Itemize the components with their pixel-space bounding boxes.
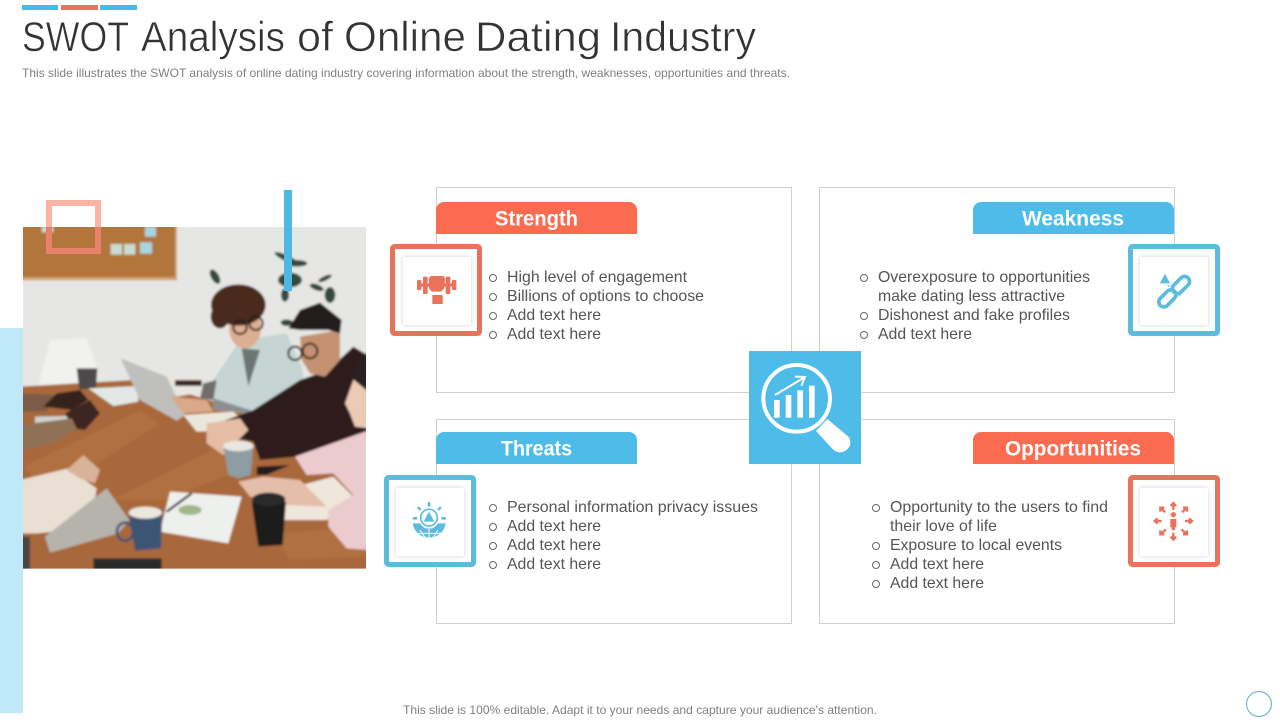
opportunities heading: Opportunities [1005, 438, 1141, 460]
weakness list: Add text here [878, 326, 972, 343]
opportunities list [872, 499, 1108, 592]
strength list: High level of engagement [507, 269, 688, 286]
weakness list: make dating less attractive [878, 288, 1065, 305]
threats list: Add text here [507, 537, 601, 554]
subtitle: This slide illustrates the SWOT analysis of online dating industry covering information about the strength, weaknesses, opportunities and threats. [22, 66, 790, 80]
threats heading [436, 432, 637, 464]
title: Online [344, 13, 466, 60]
weakness heading: Weakness [1022, 208, 1124, 230]
decorative blue vertical bar [284, 190, 292, 291]
left pale blue bar [0, 328, 23, 713]
title: SWOT [22, 13, 129, 60]
weakness list: Dishonest and fake profiles [878, 307, 1070, 324]
icon: person with outward arrows [1130, 478, 1218, 564]
title: Analysis [141, 13, 285, 60]
strength list [490, 269, 704, 343]
corner circle [1246, 692, 1272, 716]
panel: strength [392, 188, 792, 392]
opportunities list: Opportunity to the users to find [890, 499, 1108, 516]
opportunities list: Add text here [890, 556, 984, 573]
threats list: Add text here [507, 518, 601, 535]
title [22, 13, 756, 60]
opportunities list: their love of life [890, 518, 997, 535]
opportunities list: Exposure to local events [890, 537, 1062, 554]
decorative coral square outline [49, 203, 98, 251]
icon: broken chain link [1130, 246, 1218, 334]
weakness list: Overexposure to opportunities [878, 269, 1090, 286]
opportunities heading [973, 432, 1174, 464]
weakness list [860, 269, 1090, 343]
strength list: Add text here [507, 326, 601, 343]
title: Dating [475, 13, 601, 60]
icon: globe with warning [386, 478, 474, 564]
title: of [297, 13, 333, 60]
threats list: Personal information privacy issues [507, 499, 758, 516]
threats list [490, 499, 758, 573]
strength heading: Strength [495, 208, 578, 230]
opportunities list: Add text here [890, 575, 984, 592]
icon: dumbbell in fist [392, 246, 480, 334]
strength heading [436, 202, 637, 234]
center icon: magnifier over rising bar chart [749, 351, 861, 464]
threats list: Add text here [507, 556, 601, 573]
weakness heading [973, 202, 1174, 234]
threats heading: Threats [501, 438, 572, 460]
title: Industry [610, 13, 756, 60]
panel: threats [386, 420, 792, 624]
panel: weakness [820, 188, 1218, 392]
footer note: This slide is 100% editable. Adapt it to your needs and capture your audience's attention. [403, 703, 877, 717]
strength list: Add text here [507, 307, 601, 324]
header accent bars [22, 5, 137, 10]
panel: opportunities [820, 420, 1218, 624]
strength list: Billions of options to choose [507, 288, 704, 305]
photo: team meeting around a table [20, 223, 370, 572]
